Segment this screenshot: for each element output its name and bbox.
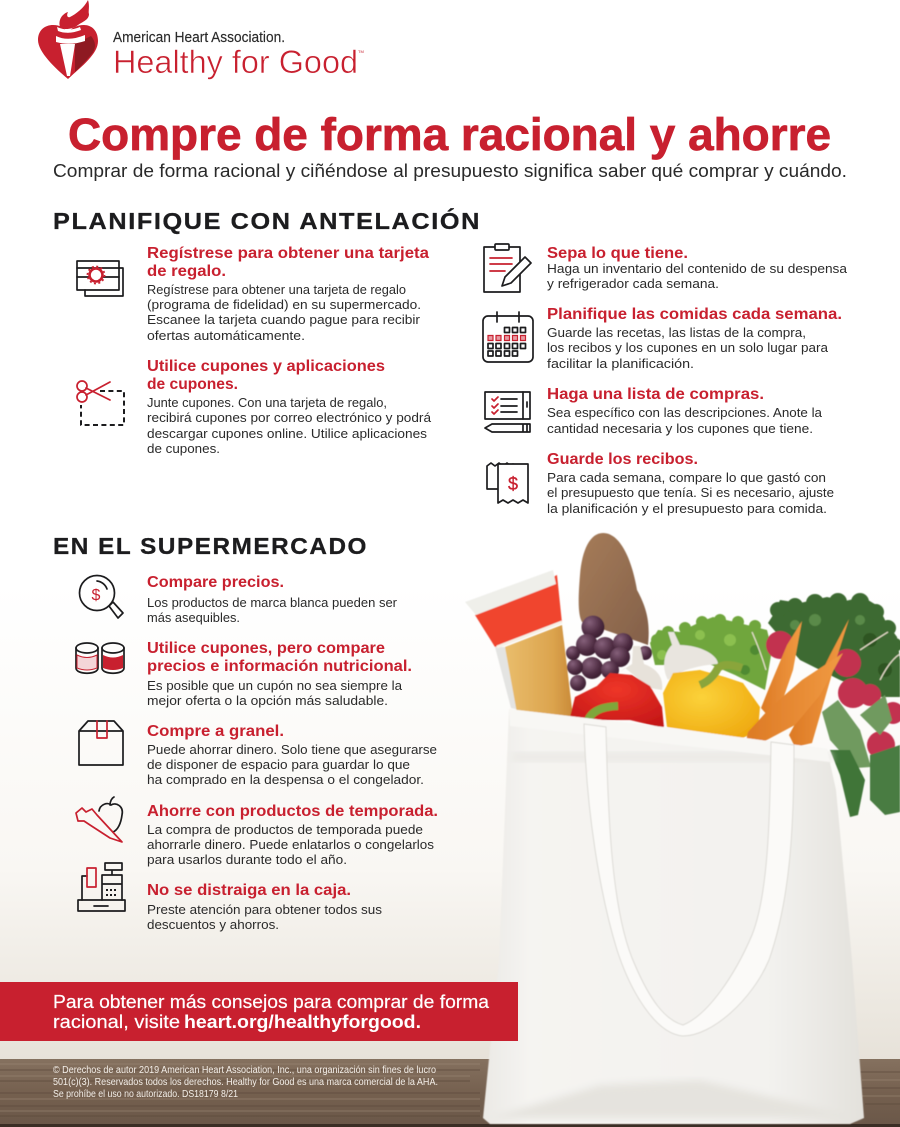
item: tarjeta de regalo — [77, 245, 429, 343]
text: de disponer de espacio para guardar lo que — [147, 757, 410, 772]
text — [147, 803, 438, 867]
copyright note: © Derechos de autor 2019 American Heart Association, Inc., una organización sin fines de lucro — [53, 1065, 436, 1076]
text: recibirá cupones por correo electrónico y podrá — [147, 410, 432, 425]
text: los recibos y los cupones en un solo lugar para — [547, 340, 829, 355]
healthy for good wordmark: Healthy for Good — [113, 44, 358, 80]
yellow pepper stem — [700, 665, 742, 685]
association name: American Heart Association. — [113, 30, 285, 46]
title: Compre de forma racional y ahorre — [68, 109, 831, 160]
item: productos de temporada — [76, 797, 438, 867]
text — [547, 245, 848, 291]
text: ha comprado en la despensa o el congelador. — [147, 772, 424, 787]
copyright note: 501(c)(3). Reservados todos los derechos. Healthy for Good es una marca comercial de la AHA. — [53, 1077, 438, 1088]
text: Sepa lo que tiene. — [547, 245, 688, 262]
grapes — [566, 616, 652, 691]
text: de cupones. — [147, 441, 220, 456]
text: la planificación y el presupuesto para comida. — [547, 501, 827, 516]
item: sepa lo que tiene — [484, 244, 848, 292]
icon: magnifying glass: $ — [92, 587, 100, 604]
radishes — [766, 631, 900, 759]
text: facilitar la planificación. — [547, 356, 694, 371]
icon: gift cards — [77, 261, 123, 296]
copyright note — [53, 1065, 438, 1100]
radish roots — [752, 632, 900, 680]
text: y refrigerador cada semana. — [547, 276, 719, 291]
heading: EN EL SUPERMERCADO — [53, 533, 368, 559]
item: no se distraiga en la caja — [78, 863, 383, 932]
text: mejor oferta o la opción más saludable. — [147, 693, 388, 708]
logo: American Heart Association Healthy for Good — [38, 0, 364, 80]
text — [547, 386, 823, 436]
text: Para cada semana, compare lo que gastó con — [547, 470, 826, 485]
callout: more tips banner: Para obtener más consejos para comprar de forma — [53, 991, 490, 1012]
text: descuentos y ahorros. — [147, 917, 279, 932]
icon: apple and carrot — [76, 797, 122, 842]
pepper stem green — [587, 706, 618, 724]
kale — [768, 593, 900, 697]
item: cupones y aplicaciones — [77, 358, 432, 456]
copyright note: Se prohíbe el uso no autorizado. DS18179 8/21 — [53, 1089, 238, 1100]
text — [147, 574, 398, 625]
text: ofertas automáticamente. — [147, 328, 305, 343]
text — [147, 245, 429, 343]
red bell pepper — [570, 673, 664, 728]
text: más asequibles. — [147, 610, 240, 625]
item: compre a granel — [79, 721, 437, 787]
text: de regalo. — [147, 263, 226, 280]
callout: more tips banner — [0, 982, 518, 1041]
text: La compra de productos de temporada puede — [147, 822, 423, 837]
text: precios e información nutricional. — [147, 658, 412, 675]
text — [147, 640, 412, 708]
text: Guarde las recetas, las listas de la compra, — [547, 325, 806, 340]
text: Es posible que un cupón no sea siempre la — [147, 678, 403, 693]
text: No se distraiga en la caja. — [147, 882, 351, 899]
text: ahorrarle dinero. Puede enlatarlos o congelarlos — [147, 837, 435, 852]
subtitle: Comprar de forma racional y ciñéndose al presupuesto significa saber qué comprar y cuándo. — [53, 160, 847, 181]
text: Preste atención para obtener todos sus — [147, 902, 383, 917]
text: el presupuesto que tenía. Si es necesario, ajuste — [547, 485, 834, 500]
carrots — [746, 619, 849, 747]
callout: more tips banner: racional, visite — [53, 1011, 180, 1032]
spaghetti package — [465, 570, 573, 717]
text: para usarlos durante todo el año. — [147, 852, 347, 867]
icon: cans — [76, 643, 124, 673]
wooden table surface — [0, 1059, 900, 1127]
text: Haga una lista de compras. — [547, 386, 764, 403]
text: Junte cupones. Con una tarjeta de regalo, — [147, 395, 387, 410]
text: cantidad necesaria y los cupones que tiene. — [547, 421, 813, 436]
photo: shopping bag with groceries — [465, 533, 900, 1124]
garlic bulbs — [620, 632, 718, 690]
icon: receipts — [487, 463, 528, 503]
icon: receipts: $ — [508, 474, 518, 494]
item: planifique las comidas — [483, 306, 842, 371]
text: Puede ahorrar dinero. Solo tiene que asegurarse — [147, 742, 437, 757]
item: cupones e información nutricional — [76, 640, 412, 708]
text: Compare precios. — [147, 574, 284, 591]
item: compare precios — [80, 574, 398, 625]
item: lista de compras — [485, 386, 823, 436]
text: Regístrese para obtener una tarjeta de regalo — [147, 282, 406, 297]
text: Utilice cupones y aplicaciones — [147, 358, 385, 375]
text — [147, 723, 437, 787]
item: guarde los recibos — [487, 451, 834, 516]
radish leaves — [822, 695, 900, 817]
icon: box — [79, 721, 123, 765]
text: Guarde los recibos. — [547, 451, 698, 468]
text — [147, 358, 432, 456]
icon: magnifying glass — [80, 576, 123, 618]
bag handle loop — [584, 724, 794, 1036]
yellow bell pepper — [663, 670, 760, 738]
section: en el supermercado — [53, 533, 438, 932]
bag body — [483, 709, 864, 1124]
bag bottom shading — [490, 1080, 860, 1118]
text: Compre a granel. — [147, 723, 284, 740]
icon: clipboard and pencil — [484, 244, 531, 292]
bread — [579, 533, 649, 645]
text: Sea específico con las descripciones. Anote la — [547, 405, 823, 420]
icon: checklist and pencil — [485, 392, 530, 432]
text — [547, 306, 842, 371]
text: Regístrese para obtener una tarjeta — [147, 245, 429, 262]
icon: calendar — [483, 312, 533, 362]
icon: cash register — [78, 863, 125, 911]
bag fold shading — [512, 752, 832, 762]
section: planifique con antelación — [53, 207, 848, 516]
text: Planifique las comidas cada semana. — [547, 306, 842, 323]
heading: PLANIFIQUE CON ANTELACIÓN — [53, 207, 481, 234]
bag rim fold — [509, 709, 830, 762]
text — [147, 882, 383, 932]
text — [547, 451, 834, 516]
text: Escanee la tarjeta cuando pague para recibir — [147, 312, 421, 327]
text: de cupones. — [147, 376, 238, 393]
icon: scissors cutting coupon — [77, 381, 124, 425]
icon: heart and torch — [38, 0, 98, 79]
text: Ahorre con productos de temporada. — [147, 803, 438, 820]
text: Utilice cupones, pero compare — [147, 640, 385, 657]
text: descargar cupones online. Utilice aplicaciones — [147, 426, 428, 441]
text: (programa de fidelidad) en su supermercado. — [147, 297, 421, 312]
trademark: TM — [358, 49, 364, 54]
bag strap back left — [584, 724, 607, 790]
text: Haga un inventario del contenido de su despensa — [547, 261, 848, 276]
callout: more tips banner: heart.org/healthyforgood. — [184, 1011, 421, 1032]
text: Los productos de marca blanca pueden ser — [147, 595, 398, 610]
lettuce — [650, 614, 772, 690]
